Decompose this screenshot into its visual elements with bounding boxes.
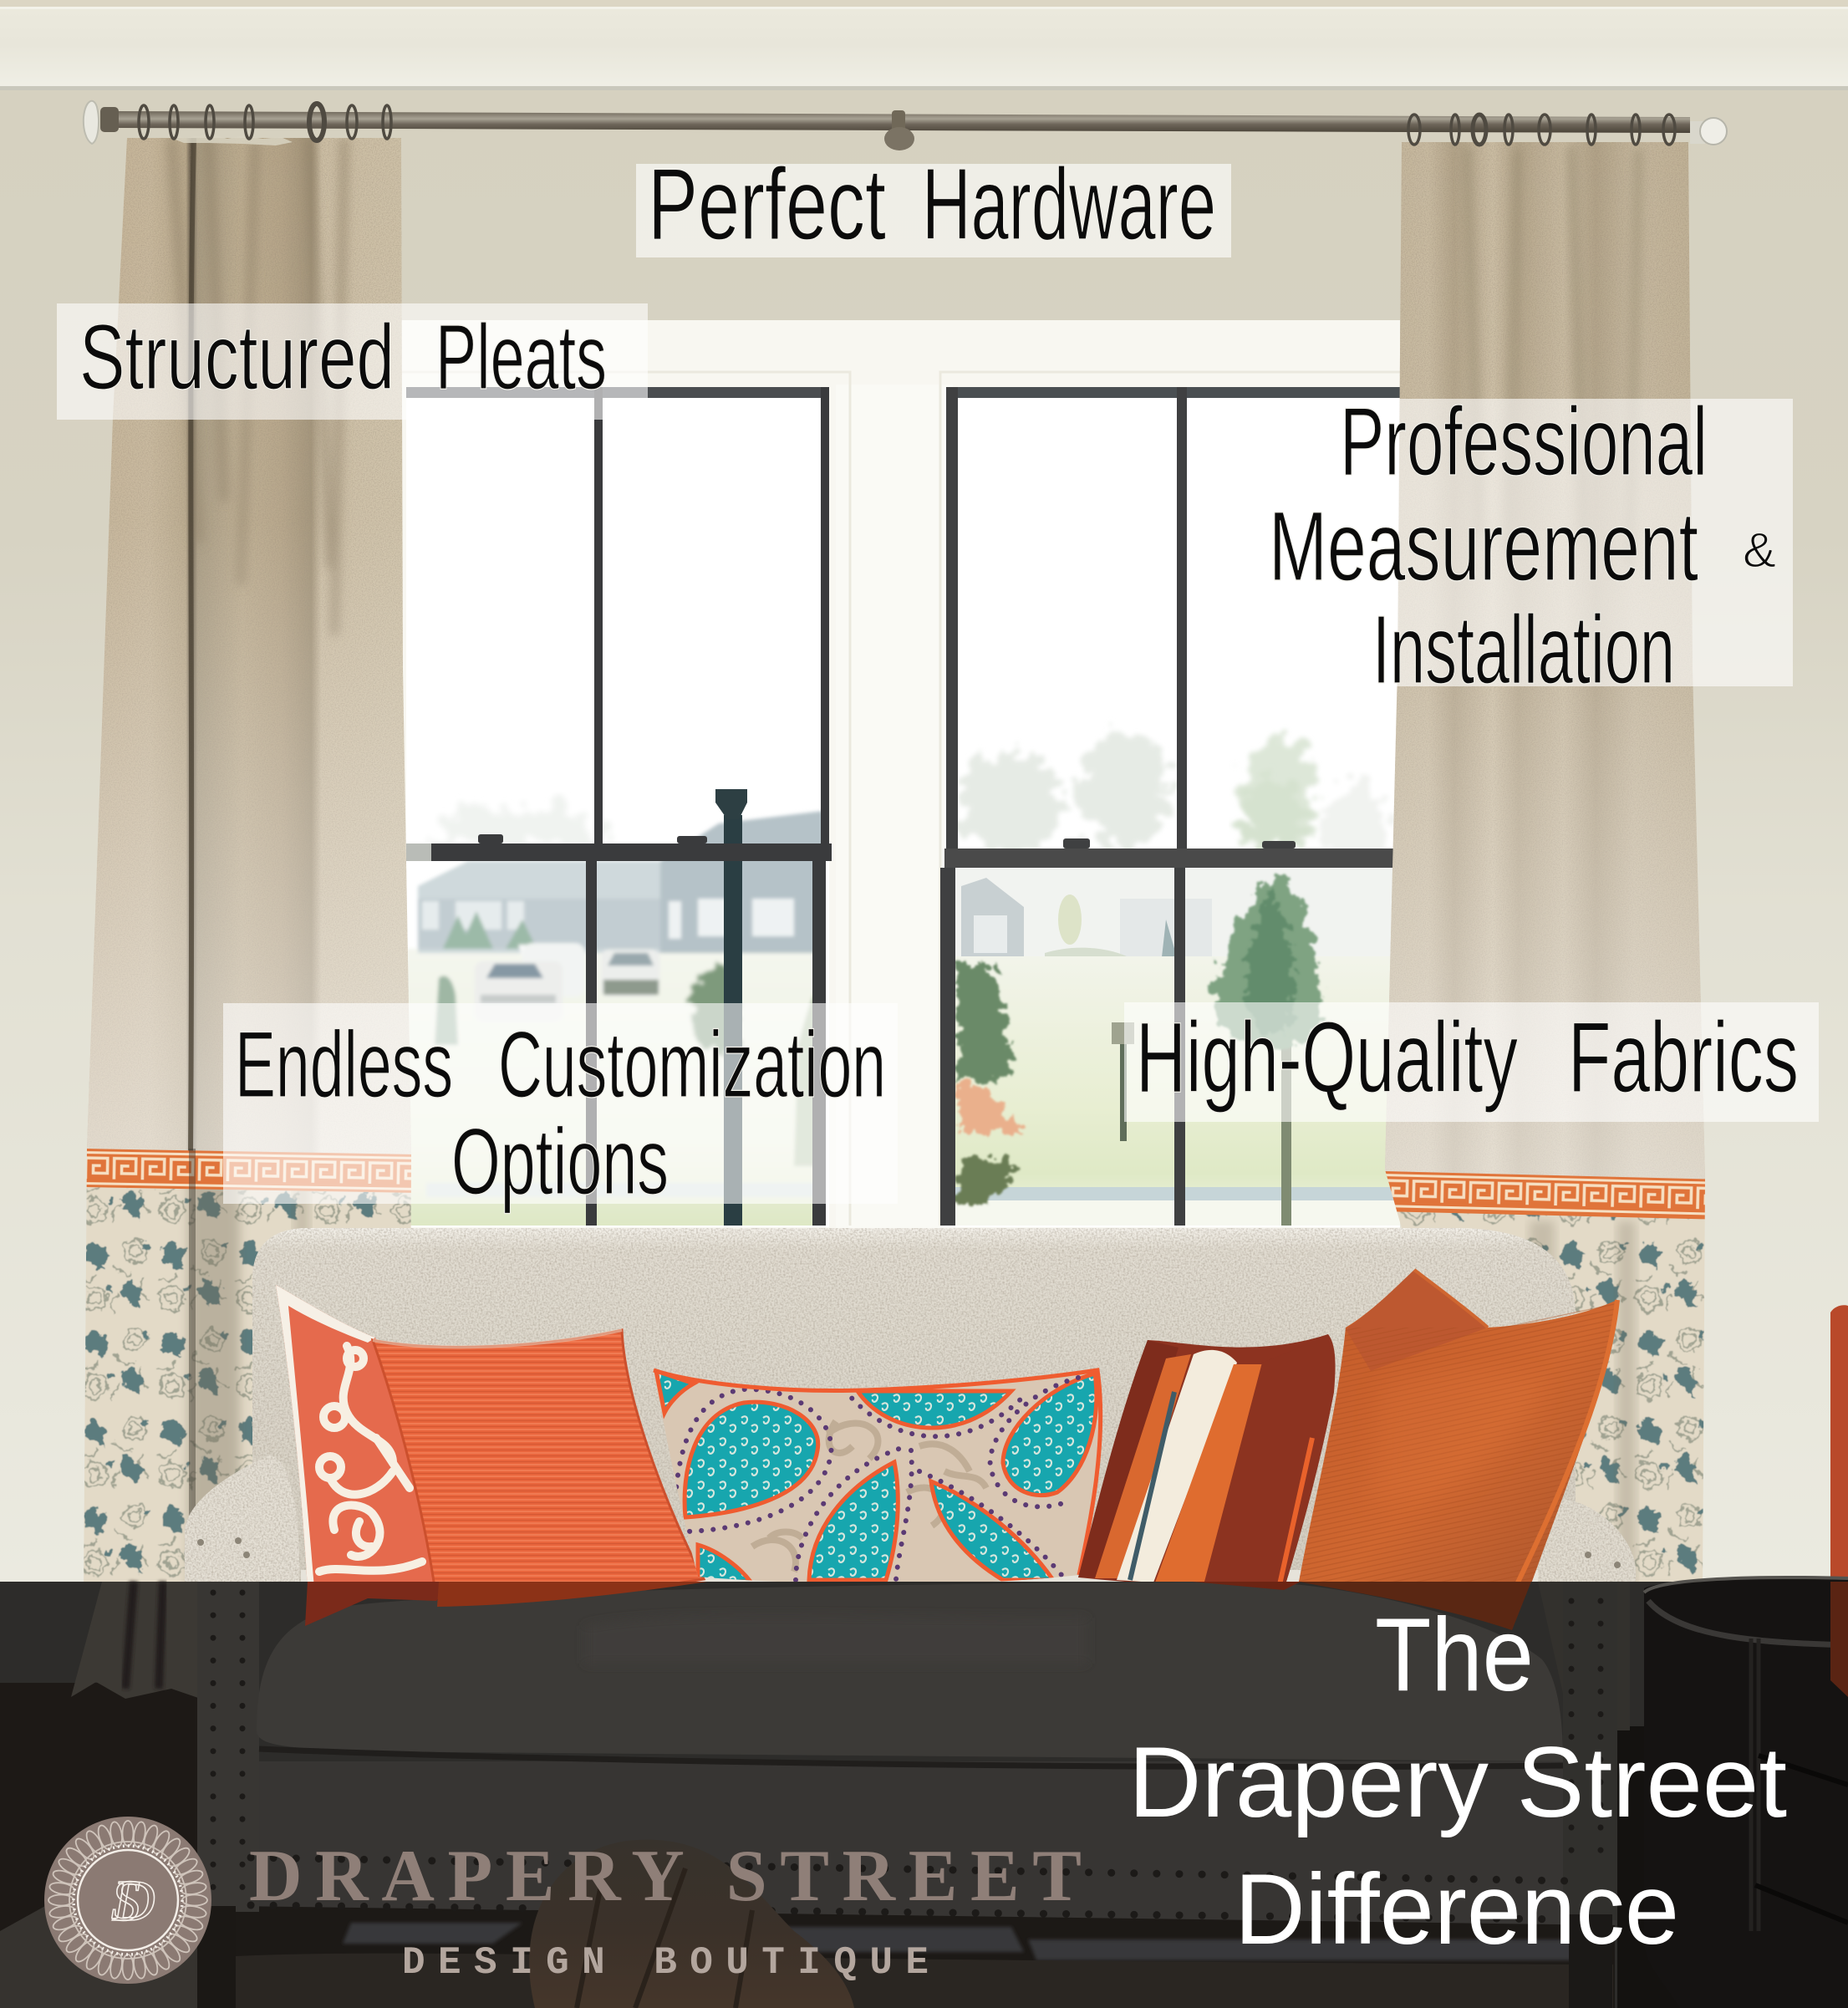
paisley motifs — [656, 1371, 1097, 1582]
brand wordmark: DRAPERY STREET — [249, 1836, 1082, 1917]
dark band with lower room — [0, 1577, 1848, 2008]
right finial — [1690, 118, 1727, 145]
title: the drapery street difference: The — [1375, 1598, 1534, 1713]
centre bracket — [884, 110, 914, 150]
cars — [478, 941, 660, 1003]
brand wordmark — [249, 1836, 1082, 1985]
side table — [1644, 1577, 1848, 2008]
label: perfect hardware — [636, 147, 1231, 261]
label: high-quality fabrics: High-Quality — [1136, 1001, 1518, 1114]
wall base and floor — [0, 1683, 201, 2008]
left finial — [84, 101, 119, 144]
curtain rings — [139, 104, 1675, 145]
label: structured pleats: Pleats — [435, 306, 607, 409]
greek key band — [83, 1149, 418, 1193]
driftwood decoration — [529, 1840, 854, 2008]
title: the drapery street difference — [1128, 1598, 1787, 1965]
left window — [406, 387, 832, 1233]
lamp post — [715, 789, 747, 1233]
curtain tails in shade — [71, 1582, 201, 1699]
label: structured pleats: Structured — [79, 306, 395, 409]
ceiling crown moulding — [0, 0, 1848, 90]
sign post — [1112, 1022, 1134, 1141]
right arm — [1513, 1500, 1636, 1588]
background wall — [0, 89, 1848, 1586]
sofa lower body — [234, 1761, 1617, 1925]
shaded pillow bottoms — [305, 1582, 1531, 1630]
right window outdoor scene — [953, 731, 1400, 1228]
label: professional measurement and installation — [1258, 387, 1793, 704]
title: the drapery street difference: Difference — [1235, 1853, 1679, 1965]
label: structured pleats — [57, 303, 648, 420]
lace ring — [48, 1821, 207, 1980]
orange textured pillow — [373, 1330, 704, 1605]
right window — [940, 387, 1400, 1228]
large orange pillow — [1299, 1270, 1617, 1588]
label: endless customization options — [223, 1003, 898, 1214]
label: professional measurement and installation: & — [1743, 523, 1776, 578]
white scrollwork — [319, 1346, 422, 1572]
purple dots — [675, 1378, 1078, 1580]
arm rivets — [197, 1537, 1621, 1568]
striped pillow — [1078, 1334, 1336, 1590]
label: perfect hardware: Hardware — [922, 147, 1216, 261]
garden bushes — [958, 963, 1024, 1204]
sofa rivets — [213, 1593, 1601, 1919]
label: endless customization options: Customization — [498, 1012, 886, 1117]
greek key band — [1382, 1171, 1713, 1220]
tree in right window — [1214, 765, 1321, 1227]
label: endless customization options: Endless — [235, 1012, 453, 1117]
logo badge — [44, 1817, 211, 1984]
pleat header — [167, 134, 293, 145]
floral print — [79, 1179, 414, 1597]
sofa back — [252, 1228, 1576, 1588]
left window frame — [406, 387, 832, 1226]
title: the drapery street difference: Drapery Street — [1128, 1726, 1787, 1838]
monogram: S — [111, 1869, 140, 1934]
seat cushion — [257, 1582, 1563, 1761]
right curtain — [1379, 138, 1713, 1597]
label: professional measurement and installation: Installation — [1372, 595, 1675, 704]
curtain rod and rings — [84, 101, 1727, 150]
label: endless customization options: Options — [451, 1109, 669, 1214]
sofa upper body — [185, 1228, 1636, 1588]
paisley lumbar pillow — [654, 1370, 1101, 1584]
brand wordmark: DESIGN BOUTIQUE — [402, 1941, 929, 1985]
chair edge at right — [1830, 1305, 1848, 1584]
monogram: D — [112, 1869, 155, 1934]
red scroll pillow — [276, 1285, 451, 1588]
left window outdoor scene — [406, 803, 824, 1229]
right window frame — [940, 387, 1400, 1226]
under sofa shadow — [236, 1906, 1615, 2008]
label: perfect hardware: Perfect — [648, 147, 886, 261]
window trim — [401, 320, 1400, 1231]
left arm — [185, 1455, 299, 1588]
floral print — [1396, 1207, 1705, 1582]
left curtain — [79, 134, 418, 1597]
